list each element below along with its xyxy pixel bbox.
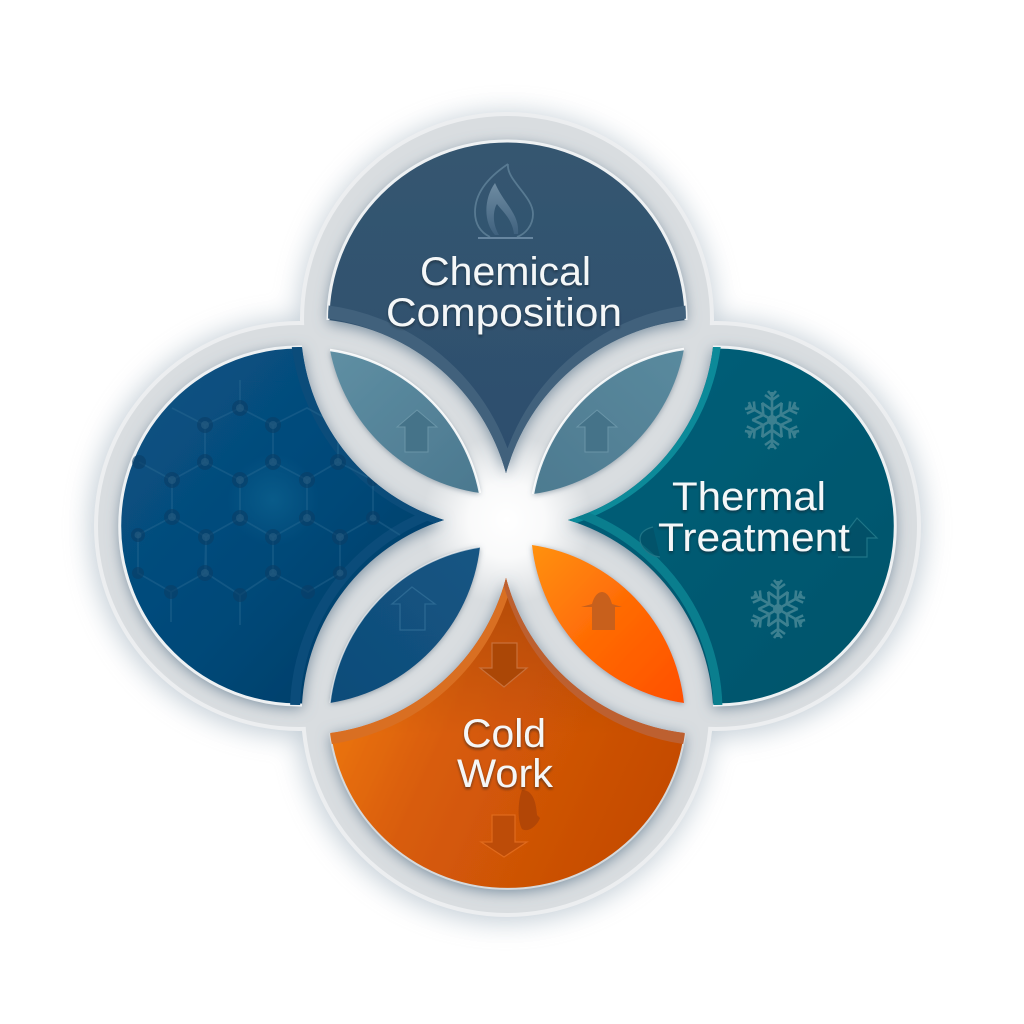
lens: top left (330, 350, 480, 493)
panel: thermal treatment (566, 342, 904, 716)
icon: snowflake lower (748, 580, 808, 638)
panel: cold work (323, 578, 692, 900)
label: thermal treatment: Thermal (672, 475, 826, 519)
icon: faint arrow outlines (640, 518, 877, 557)
icon: smudge mark (519, 790, 540, 830)
icon: up arrow (397, 410, 437, 452)
label: thermal treatment (658, 475, 850, 560)
hexagon network (131, 380, 400, 625)
icon: up arrow outline (392, 587, 435, 630)
icon: flame (475, 164, 533, 238)
panel: chemical composition (320, 135, 694, 478)
grey frame silhouette (94, 112, 921, 917)
label: cold work (457, 712, 554, 796)
icon: snowflake upper (742, 391, 802, 449)
panel: left circle, molecular lattice (111, 342, 446, 716)
label: cold work: Work (457, 752, 554, 796)
label: cold work: Cold (462, 712, 546, 756)
label: thermal treatment: Treatment (658, 516, 850, 560)
icon: down arrow upper (480, 643, 527, 687)
label: chemical composition: Chemical (420, 250, 591, 294)
icon: up arrow solid (581, 592, 622, 630)
centre glow (422, 435, 592, 605)
icon: down arrow lower (481, 815, 527, 857)
label: chemical composition: Composition (386, 291, 622, 335)
lens: bottom left (330, 547, 480, 703)
lens: bottom right (532, 545, 684, 703)
label: chemical composition (386, 250, 622, 335)
soft outer shadow (90, 113, 924, 922)
lens: top right (533, 349, 684, 494)
icon: up arrow (577, 410, 617, 452)
